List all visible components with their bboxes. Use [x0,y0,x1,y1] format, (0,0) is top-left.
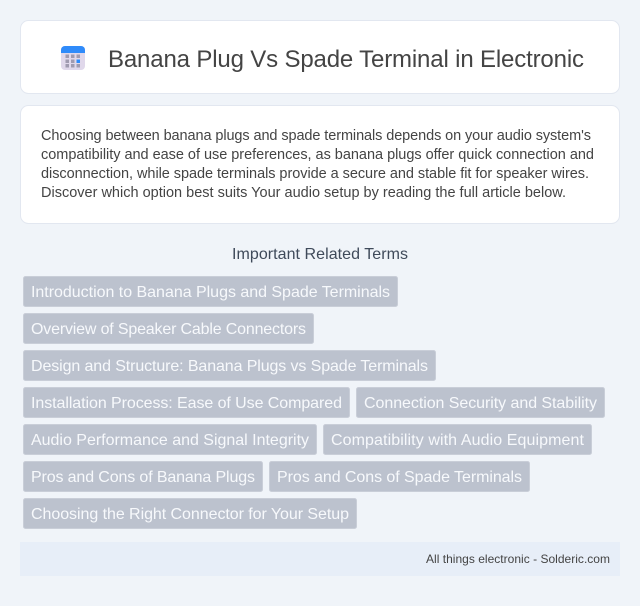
panel: introduction text: Discover which option best suits Your audio setup by reading the full article below. [41,185,566,201]
tag: compatibility [324,424,592,454]
title: Banana Plug Vs Spade Terminal in Electronic [108,46,584,73]
tag: installation [24,388,350,418]
heading: important related terms: Important Related Terms [232,246,408,263]
tag: audio performance [24,424,316,454]
tag: introduction [24,276,398,306]
panel: introduction text: disconnection, while spade terminals provide a secure and stable fit for speaker wires. [41,166,589,182]
tag: design: Design and Structure: Banana Plugs vs Spade Terminals [31,358,428,375]
footer [20,542,620,576]
tag: audio performance: Audio Performance and Signal Integrity [31,432,309,449]
tag: pros and cons spade: Pros and Cons of Spade Terminals [277,469,522,486]
tag: pros and cons banana [24,462,262,492]
tag: overview: Overview of Speaker Cable Connectors [31,321,306,338]
tag: introduction: Introduction to Banana Plugs and Spade Terminals [31,284,390,301]
tag: installation: Installation Process: Ease of Use Compared [31,395,342,412]
tag: connection security: Connection Security and Stability [364,395,597,412]
icon: calendar [61,46,85,70]
tag: compatibility: Compatibility with Audio Equipment [331,432,585,449]
footer: All things electronic - Solderic.com [426,552,610,566]
tag: connection security [356,388,604,418]
panel: introduction text: compatibility and ease of use preferences, as banana plugs offer quick connection and [41,147,594,163]
tag: overview [24,314,314,344]
tag: choosing connector: Choosing the Right Connector for Your Setup [31,506,349,523]
tag: pros and cons banana: Pros and Cons of Banana Plugs [31,469,255,486]
panel: introduction text [20,106,620,224]
tag: choosing connector [24,498,356,528]
tag: pros and cons spade [270,462,530,492]
tag: design [24,350,436,380]
panel: introduction text: Choosing between banana plugs and spade terminals depends on your audio system's [41,128,591,144]
tag list [24,276,604,528]
panel: title header [20,20,620,94]
